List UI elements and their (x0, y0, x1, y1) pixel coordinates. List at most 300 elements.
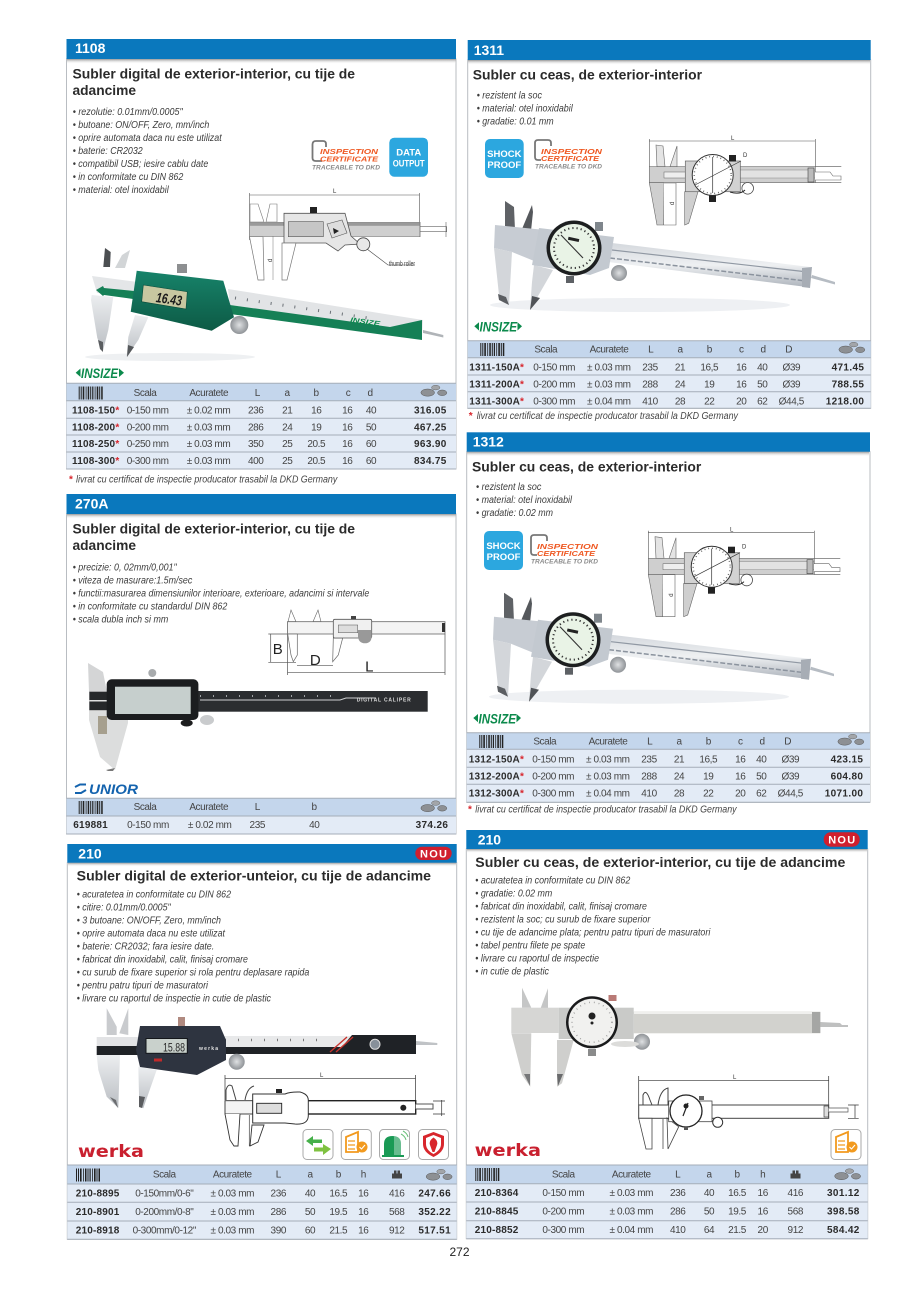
title: 1108 (72, 66, 355, 98)
feature list: 1108: • material: otel inoxidabil (73, 185, 169, 196)
feature list: 210 digital: • 3 butoane: ON/OFF, Zero, mm/inch (77, 916, 221, 926)
table: 210 digital: 247.66 (418, 1189, 451, 1200)
table: 210 dial: 16 (758, 1207, 769, 1218)
header: 1311: 1311 (474, 42, 504, 58)
table: 1311: 40 (757, 362, 768, 373)
table: 1311: 0-300 mm (533, 396, 575, 407)
table: 1108: 1108-300* (72, 456, 119, 467)
table: 210 dial: Acuratete (612, 1170, 652, 1181)
header: 1312 (467, 432, 870, 452)
table: 1312: 16,5 (699, 754, 718, 765)
table: 1312: Ø39 (781, 771, 800, 782)
table: 270A: 40 (309, 820, 320, 831)
table: 270A: b (311, 802, 317, 813)
feature list: 210 dial: • cu tije de adancime plata; pentru patru tipuri de masuratori (475, 928, 711, 938)
table: 210 digital: a (307, 1170, 313, 1181)
table: 1312: 21 (674, 754, 685, 765)
panel: 1311 (468, 40, 871, 408)
table: 1311: 21 (675, 362, 686, 373)
feature list: 1108 (73, 107, 223, 196)
feature list: 270A: • precizie: 0, 02mm/0,001" (73, 562, 177, 574)
table: 210 dial: 210-8852 (475, 1225, 519, 1236)
technical drawing: 1108: thumb roller (389, 261, 415, 268)
panel: 270A (66, 494, 456, 834)
table: 1311: 28 (675, 396, 686, 407)
table: 1108: 467.25 (414, 422, 447, 433)
feature list: 270A (73, 562, 370, 626)
technical drawing: 210 digital (225, 1073, 445, 1146)
table: 1108: 286 (248, 422, 264, 433)
feature list: 1108: • oprire automata daca nu este utilizat (73, 133, 223, 144)
badge: shock proof: SHOCK (487, 149, 522, 160)
table: 210 dial: 40 (704, 1188, 715, 1199)
photo: digital caliper green (85, 248, 443, 361)
table: 210 digital: 236 (271, 1189, 287, 1200)
table: 210 digital: 0-150mm/0-6" (135, 1189, 194, 1200)
badge: inspection certificate: INSPECTION (320, 147, 379, 156)
table: 210 dial: 416 (788, 1188, 804, 1199)
table: 210 digital: 0-200mm/0-8" (135, 1207, 194, 1218)
badge: NOU: NOU (420, 848, 447, 860)
table: 1312: L (647, 736, 653, 747)
feature list: 1108: • baterie: CR2032 (73, 146, 143, 157)
table: 210 dial: 210-8364 (475, 1188, 519, 1199)
badge: inspection certificate: CERTIFICATE (537, 549, 596, 558)
logo: INSIZE: INSIZE (81, 365, 119, 381)
table: 1312: Ø44,5 (778, 788, 804, 799)
badge: data output: OUTPUT (393, 158, 425, 170)
table: 210 dial: h (760, 1170, 765, 1181)
icon: beacon (380, 1130, 410, 1160)
table: 1312: 1312-200A* (469, 771, 524, 782)
table: 270A: 374.26 (416, 820, 448, 831)
footnote: 1312: livrat cu certificat de inspectie producator trasabil la DKD Germany (475, 805, 737, 816)
table: 1108: 963.90 (414, 439, 447, 450)
table: 1311: Ø39 (782, 379, 801, 390)
table: 210 digital: 16 (358, 1189, 369, 1200)
table: 1312: 28 (674, 788, 685, 799)
table: 1108: 316.05 (414, 405, 447, 416)
table: 1311: ± 0.04 mm (587, 396, 631, 407)
table: 1312: 19 (703, 771, 714, 782)
table: 1108: 16 (311, 405, 322, 416)
title: 1108: adancime (72, 82, 136, 98)
title: 270A: adancime (72, 537, 136, 553)
feature list: 210 dial: • acuratetea in conformitate cu DIN 862 (475, 876, 631, 886)
table: 1108: 20.5 (307, 439, 326, 450)
photo: werka digital caliper: werka (198, 1046, 218, 1052)
table: 210 dial: 410 (670, 1225, 686, 1236)
table: 1108: 60 (366, 456, 377, 467)
table: 210 dial: 19.5 (728, 1207, 747, 1218)
table: 1311: 19 (704, 379, 715, 390)
table: 1108: 834.75 (414, 456, 447, 467)
table: 210 dial: 912 (788, 1225, 804, 1236)
title: 1311: Subler cu ceas, de exterior-interior (473, 66, 703, 82)
footnote: 1311: * (469, 411, 473, 422)
title: 210 dial: Subler cu ceas, de exterior-interior, cu tije de adancime (475, 854, 846, 870)
header: 210 digital (67, 844, 457, 863)
table: 270A: 0-150 mm (127, 820, 169, 831)
table: 1311: c (739, 344, 744, 355)
table: 210 digital: b (336, 1170, 342, 1181)
feature list: 1312: • material: otel inoxidabil (476, 495, 573, 506)
table: 1108: 40 (366, 405, 377, 416)
table: 1108: 0-150 mm (127, 405, 169, 416)
header: 1108 (66, 39, 456, 59)
feature list: 210 digital: • fabricat din inoxidabil, calit, finisaj cromare (77, 954, 248, 966)
table: 1311: 1218.00 (826, 396, 864, 407)
table: 1311: 50 (757, 379, 768, 390)
table: 1312: D (784, 736, 791, 747)
table: 210 dial: ± 0.04 mm (610, 1225, 653, 1236)
table: 1312: a (676, 736, 682, 747)
table: 210 digital: 568 (389, 1207, 405, 1218)
logo: werka: werka (78, 1142, 144, 1162)
feature list: 270A: • in conformitate cu standardul DIN 862 (73, 602, 228, 612)
table: 1311: 0-200 mm (533, 379, 575, 390)
table: 210 digital: 16 (358, 1207, 369, 1218)
table: 210 digital: 517.51 (418, 1226, 451, 1237)
table: 1312: 20 (735, 788, 746, 799)
table: 210 digital: ± 0.03 mm (211, 1226, 254, 1237)
table: 210 digital: Scala (153, 1170, 177, 1181)
table: 1108: Acuratete (189, 388, 229, 399)
header: 210 dial (466, 830, 868, 849)
table: 1311: 62 (757, 396, 768, 407)
technical drawing: 1312 (648, 528, 840, 617)
feature list: 210 digital: • pentru patru tipuri de masuratori (77, 980, 209, 992)
table: 1108: ± 0.03 mm (187, 456, 230, 467)
technical drawing: 1312: d (669, 593, 675, 597)
table: 210 dial: 286 (670, 1207, 686, 1218)
table: 210 dial: 64 (704, 1225, 715, 1236)
table: 210 digital: 16.5 (329, 1189, 348, 1200)
table: 210 digital: 60 (305, 1226, 316, 1237)
table: 210 digital: Acuratete (213, 1170, 253, 1181)
technical drawing: 1108 (250, 189, 447, 280)
feature list: 210 digital: • cu surub de fixare superior si rola pentru deplasare rapida (77, 968, 310, 978)
table: 210 digital: h (361, 1170, 366, 1181)
table: 1108: ± 0.03 mm (187, 439, 230, 450)
table: 1311: a (677, 344, 683, 355)
table: 210 dial: ± 0.03 mm (610, 1207, 653, 1218)
technical drawing: 1311: L (731, 136, 735, 142)
icon: inspection report (341, 1130, 371, 1160)
logo: INSIZE: INSIZE (478, 710, 517, 726)
table: 1312: ± 0.03 mm (586, 754, 630, 765)
table: 1108: 0-200 mm (127, 422, 169, 433)
badge: inspection certificate: TRACEABLE TO DKD (535, 164, 602, 170)
feature list: 1312 (476, 482, 573, 519)
badge: inspection certificate: TRACEABLE TO DKD (312, 164, 380, 172)
table: 1311: 20 (736, 396, 747, 407)
photo: dial caliper 1311 (490, 201, 835, 312)
feature list: 270A: • functii:masurarea dimensiunilor interioare, exterioare, adancimi si intervale (73, 588, 370, 600)
technical drawing: 1108: d (268, 259, 274, 262)
table: 1312: 604.80 (831, 771, 863, 782)
table: 1311: 16,5 (700, 362, 719, 373)
table: 270A: 619881 (73, 820, 108, 831)
footnote: 1312: * (468, 805, 472, 816)
table: 1108: 1108-150* (72, 405, 119, 416)
table: 270A: 235 (250, 820, 266, 831)
table: 210 digital: 19.5 (329, 1207, 348, 1218)
badge: shock proof: PROOF (487, 552, 521, 563)
header: 1311 (468, 40, 871, 60)
table: 1311: 22 (704, 396, 715, 407)
technical drawing: 1312: L (730, 528, 734, 534)
table: 1311: 410 (642, 396, 659, 407)
table: 1108: Scala (134, 388, 157, 399)
table: 210 dial: 0-150 mm (542, 1188, 584, 1199)
table: 1311: Ø39 (782, 362, 801, 373)
table: 1311: 16 (736, 379, 747, 390)
table: 1311: Scala (534, 344, 558, 355)
table: 210 digital: 0-300mm/0-12" (133, 1226, 197, 1237)
table: 1312: 50 (756, 771, 767, 782)
table: 1311: 471.45 (832, 362, 864, 373)
table: 1108: 1108-200* (72, 422, 119, 433)
feature list: 1108: • rezolutie: 0.01mm/0.0005" (73, 107, 183, 118)
table: 210 digital: 16 (358, 1226, 369, 1237)
table: 1312: 1071.00 (825, 788, 863, 799)
technical drawing: 210 dial (639, 1075, 859, 1149)
table: 1311: 16 (736, 362, 747, 373)
table: 1312: 235 (641, 754, 658, 765)
technical drawing: 1311 (649, 136, 841, 225)
table: 210 digital: 390 (271, 1226, 287, 1237)
table: 210 dial: 16 (758, 1188, 769, 1199)
badge: inspection certificate: INSPECTION (537, 542, 599, 551)
table: 1312: 40 (756, 754, 767, 765)
feature list: 1311 (477, 90, 573, 128)
table: 1312: Scala (533, 736, 557, 747)
table: 1108: ± 0.02 mm (187, 405, 230, 416)
table: 210 digital: ± 0.03 mm (211, 1189, 254, 1200)
table: 1311: D (785, 344, 792, 355)
table: 1311: 1311-200A* (469, 379, 524, 390)
badge: inspection certificate (531, 535, 599, 566)
header: 270A (66, 494, 456, 514)
header: 1108: 1108 (75, 40, 106, 56)
table: 210 dial: b (734, 1170, 740, 1181)
table: 1108: 24 (282, 422, 293, 433)
table: 210 dial: Scala (552, 1170, 576, 1181)
feature list: 210 dial: • rezistent la soc; cu surub de fixare superior (475, 914, 651, 926)
feature list: 1108: • in conformitate cu DIN 862 (73, 172, 184, 183)
table: 210 dial: 20 (758, 1225, 769, 1236)
table: 1311: 235 (642, 362, 659, 373)
table: 1108: L (255, 388, 261, 399)
badge: data output (389, 138, 428, 177)
technical drawing: 1108: L (333, 189, 337, 195)
title: 1108: Subler digital de exterior-interior, cu tije de (72, 66, 355, 82)
photo: digital caliper black (88, 663, 428, 771)
feature list: 1108: • compatibil USB; iesire cablu date (73, 159, 209, 170)
table: 1312: 288 (641, 771, 658, 782)
table: 210 digital: 286 (271, 1207, 287, 1218)
badge: NOU (824, 832, 860, 847)
footnote: 1108: * (69, 474, 73, 485)
badge: NOU: NOU (828, 834, 855, 846)
feature list: 1108: • butoane: ON/OFF, Zero, mm/inch (73, 120, 210, 131)
page number: 272 (449, 1245, 470, 1259)
icon: inspection report (831, 1130, 861, 1160)
header: 210 dial: 210 (478, 831, 501, 847)
table: 210 dial: 16.5 (728, 1188, 747, 1199)
table: 210 digital (67, 1165, 457, 1239)
feature list: 210 dial: • tabel pentru filete pe spate (475, 940, 586, 952)
logo: INSIZE: INSIZE (480, 319, 518, 335)
table: 1312: Acuratete (589, 736, 628, 747)
table: 1312: 0-300 mm (532, 788, 574, 799)
panel: 1312 (467, 432, 870, 802)
panel: 210 digital (67, 844, 457, 1239)
header: 210 digital: 210 (78, 845, 102, 861)
table: 1312: 410 (641, 788, 658, 799)
table: 1311: Ø44,5 (779, 396, 805, 407)
table: 1311: Acuratete (590, 344, 629, 355)
table: 1312 (467, 733, 870, 802)
technical drawing: 270A: B (273, 641, 283, 658)
table: 1312: Ø39 (781, 754, 800, 765)
table: 1311: ± 0.03 mm (587, 379, 631, 390)
title: 270A: Subler digital de exterior-interior, cu tije de (72, 520, 355, 536)
feature list: 1311: • gradatie: 0.01 mm (477, 116, 554, 128)
table: 270A: L (255, 802, 261, 813)
table: 210 dial: 398.58 (827, 1207, 860, 1218)
header: 1312: 1312 (473, 434, 504, 450)
table: 1312: c (738, 736, 743, 747)
table: 1311: 24 (675, 379, 686, 390)
table: 1312: 22 (703, 788, 714, 799)
table: 1108: 236 (248, 405, 264, 416)
table: 1312: 0-200 mm (532, 771, 574, 782)
feature list: 1311: • material: otel inoxidabil (477, 104, 573, 114)
icon: transfer arrows (303, 1130, 333, 1160)
table: 1311: d (760, 344, 766, 355)
table: 1108: 0-300 mm (127, 456, 169, 467)
table: 270A: Scala (134, 802, 157, 813)
badge: data output: DATA (396, 148, 421, 158)
table: 210 dial: 0-200 mm (542, 1207, 584, 1218)
table: 210 dial: 568 (788, 1207, 804, 1218)
feature list: 1311: • rezistent la soc (477, 90, 542, 102)
feature list: 1312: • rezistent la soc (476, 482, 541, 493)
icon: shield (418, 1130, 448, 1160)
header: 270A: 270A (75, 495, 108, 511)
technical drawing: 1312: D (742, 545, 747, 551)
table: 1312: b (706, 736, 712, 747)
table: 210 digital: 50 (305, 1207, 316, 1218)
table: 210 dial: 301.12 (827, 1188, 860, 1199)
technical drawing: 1311: d (670, 202, 676, 205)
table: 210 digital: 40 (305, 1189, 316, 1200)
table: 1312: ± 0.03 mm (586, 771, 630, 782)
feature list: 270A: • scala dubla inch si mm (73, 614, 168, 626)
table: 1311: 288 (642, 379, 659, 390)
table: 1108: 1108-250* (72, 439, 119, 450)
table: 210 dial: ± 0.03 mm (610, 1188, 653, 1199)
feature list: 270A: • viteza de masurare:1.5m/sec (73, 576, 192, 586)
table: 1312: 1312-150A* (469, 754, 524, 765)
feature list: 1312: • gradatie: 0.02 mm (476, 508, 553, 519)
photo: digital caliper black: DIGITAL CALIPER (357, 698, 411, 704)
table: 1312: 1312-300A* (469, 788, 524, 799)
table: 1108: 19 (311, 422, 322, 433)
table: 210 digital: 210-8895 (76, 1189, 120, 1200)
table: 1108: 16 (342, 439, 353, 450)
technical drawing: 270A: D (310, 652, 321, 669)
table: 210 digital: 210-8918 (76, 1226, 120, 1237)
table: 1311: b (707, 344, 713, 355)
table: 1108: b (313, 388, 319, 399)
table: 210 digital: L (276, 1170, 282, 1181)
badge: inspection certificate: TRACEABLE TO DKD (531, 558, 598, 566)
table: 210 dial (466, 1165, 868, 1239)
table: 210 digital: 912 (389, 1226, 405, 1237)
table: 270A (66, 798, 456, 834)
feature list: 210 digital: • acuratetea in conformitate cu DIN 862 (77, 890, 231, 900)
badge: inspection certificate: INSPECTION (541, 147, 603, 156)
table: 1311: L (648, 344, 654, 355)
technical drawing: 210 dial: L (733, 1075, 737, 1081)
table: 1312: 16 (735, 771, 746, 782)
table: 1108: c (346, 388, 351, 399)
table: 1108: 21 (282, 405, 293, 416)
table: 1108: 25 (282, 439, 293, 450)
table: 1311: 0-150 mm (533, 362, 575, 373)
table: 1311: 1311-150A* (469, 362, 524, 373)
feature list: 210 digital: • citire: 0.01mm/0.0005" (77, 902, 171, 914)
photo: digital caliper green: INSIZE (350, 317, 381, 328)
table: 1108: 50 (366, 422, 377, 433)
table: 1108: 0-250 mm (127, 439, 169, 450)
technical drawing: 1311: D (743, 153, 748, 159)
table: 1108: 25 (282, 456, 293, 467)
logo: UNIOR: UNIOR (89, 781, 139, 797)
table: 210 dial: 210-8845 (475, 1207, 519, 1218)
table: 1108: ± 0.03 mm (187, 422, 230, 433)
feature list: 210 digital (77, 890, 310, 1004)
table: 1312: 24 (674, 771, 685, 782)
table: 1311: 788.55 (832, 379, 864, 390)
badge: inspection certificate: CERTIFICATE (541, 154, 600, 163)
badge: inspection certificate (312, 141, 380, 172)
table: 210 dial: 50 (704, 1207, 715, 1218)
technical drawing: 210 digital: L (320, 1073, 324, 1079)
feature list: 210 dial: • fabricat din inoxidabil, calit, finisaj cromare (475, 902, 647, 912)
table: 1312: d (759, 736, 765, 747)
feature list: 210 digital: • baterie: CR2032; fara iesire date. (77, 942, 214, 952)
photo: dial caliper 1312 (489, 593, 834, 704)
panel: 1108 (66, 39, 456, 469)
feature list: 210 digital: • livrare cu raportul de inspectie in cutie de plastic (77, 994, 271, 1004)
photo: werka dial caliper (511, 988, 848, 1087)
photo: werka digital caliper (97, 1008, 437, 1108)
table: 210 digital: 210-8901 (76, 1207, 120, 1218)
table: 1311: ± 0.03 mm (587, 362, 631, 373)
table: 210 digital: 352.22 (418, 1207, 451, 1218)
badge: shock proof: PROOF (487, 160, 521, 171)
feature list: 210 dial: • in cutie de plastic (475, 966, 549, 978)
table: 1108: d (367, 388, 373, 399)
feature list: 210 dial (475, 876, 711, 978)
table: 1108: 16 (342, 456, 353, 467)
table: 1312: 423.15 (831, 754, 863, 765)
table: 210 dial: a (706, 1170, 712, 1181)
